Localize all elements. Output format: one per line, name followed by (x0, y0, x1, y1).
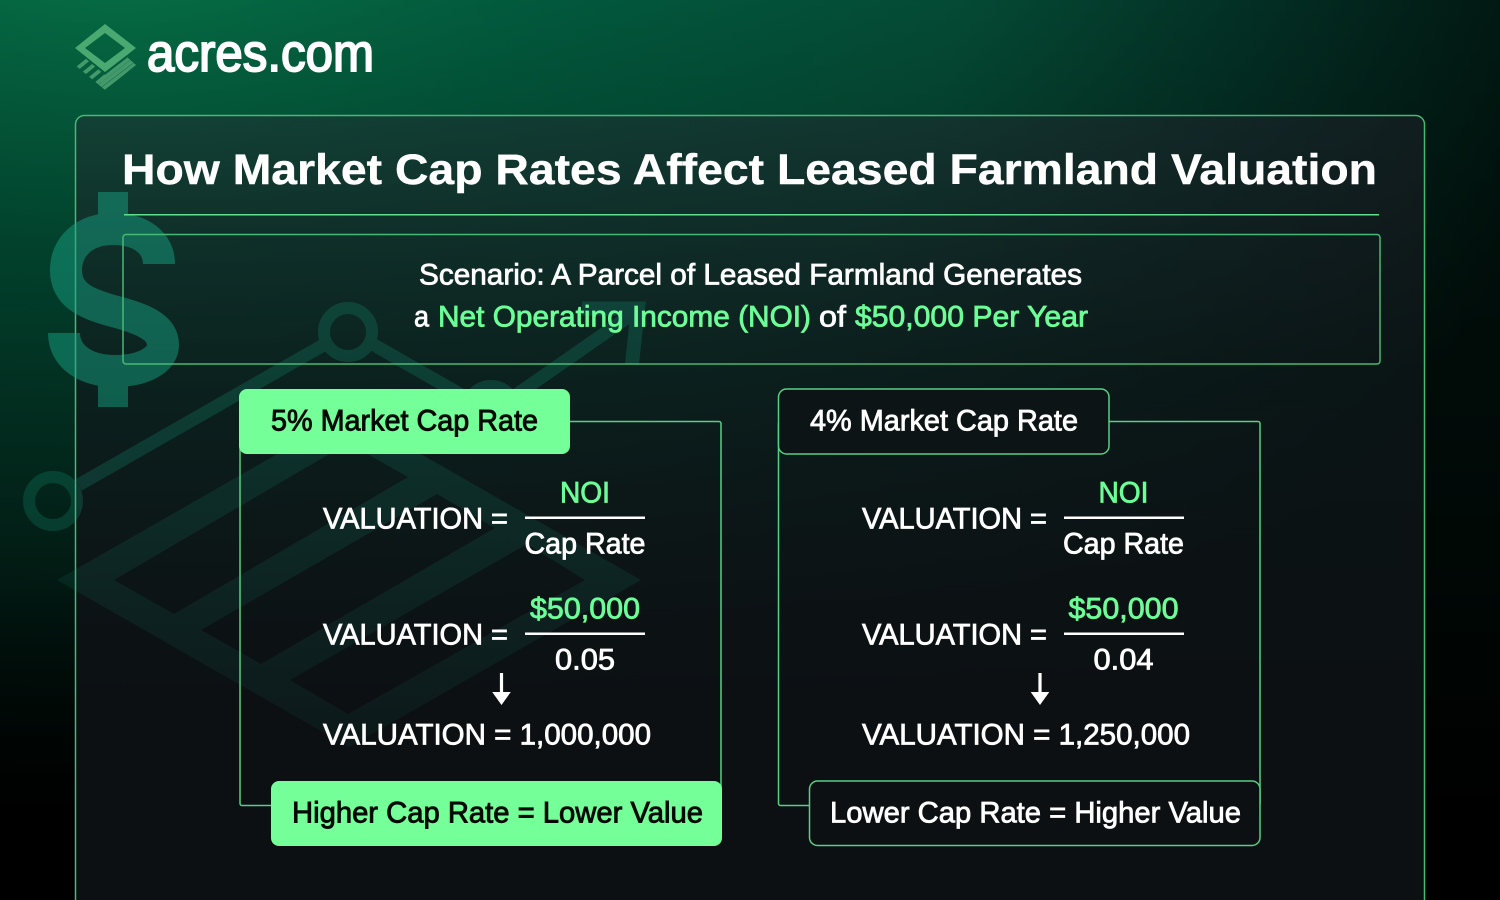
logo wordmark: acres.com (147, 24, 374, 83)
badge: 4% market cap rate: 4% Market Cap Rate (810, 404, 1078, 438)
scenario line 1: Scenario: A Parcel of Leased Farmland Generates (419, 258, 1082, 292)
result: VALUATION = 1,000,000 (323, 718, 651, 752)
watermark: dollar sign, growth line and diamond (29, 192, 641, 747)
formula 2 (862, 592, 1184, 676)
scenario line 2 (414, 300, 1088, 334)
badge: 4% market cap rate (778, 389, 1109, 454)
badge: takeaway: Higher Cap Rate = Lower Value (292, 796, 703, 830)
formula 1: VALUATION = (323, 502, 508, 536)
main panel (76, 116, 1424, 900)
scenario box (123, 234, 1380, 364)
arrow (492, 673, 511, 705)
scenario line 2: a (414, 300, 429, 334)
formula 2: $50,000 (530, 592, 640, 626)
badge: 5% market cap rate: 5% Market Cap Rate (271, 404, 538, 438)
title underline (124, 214, 1379, 216)
formula 1 (862, 476, 1184, 560)
badge: takeaway (271, 781, 722, 846)
result: VALUATION = 1,250,000 (862, 718, 1190, 752)
formula 1: NOI (560, 476, 610, 510)
arrow (1031, 673, 1049, 705)
badge: takeaway (810, 781, 1260, 846)
diamond (57, 413, 641, 747)
formula 2 (323, 592, 645, 676)
growth line (29, 308, 638, 525)
formula 1: VALUATION = (862, 502, 1047, 536)
formula 2: 0.05 (555, 644, 615, 676)
formula 2: $50,000 (1068, 592, 1178, 626)
panel: 5% cap rate (239, 389, 722, 846)
scenario line 2: of (819, 300, 847, 334)
formula 1 (323, 476, 646, 560)
badge: takeaway: Lower Cap Rate = Higher Value (830, 796, 1241, 830)
panel: 4% cap rate (778, 389, 1260, 846)
dollar sign (64, 192, 163, 407)
formula 1: Cap Rate (1063, 528, 1184, 560)
logo (74, 24, 374, 94)
icon: logo diamond (75, 24, 136, 90)
formula 2: VALUATION = (323, 618, 508, 652)
badge: 5% market cap rate (239, 389, 570, 454)
formula 2: VALUATION = (862, 618, 1047, 652)
title: How Market Cap Rates Affect Leased Farmland Valuation (122, 146, 1377, 194)
scenario line 2: $50,000 Per Year (855, 300, 1088, 334)
formula 1: Cap Rate (524, 528, 646, 560)
scenario line 2: Net Operating Income (NOI) (438, 300, 811, 334)
formula 2: 0.04 (1094, 644, 1154, 676)
formula 1: NOI (1098, 476, 1148, 510)
